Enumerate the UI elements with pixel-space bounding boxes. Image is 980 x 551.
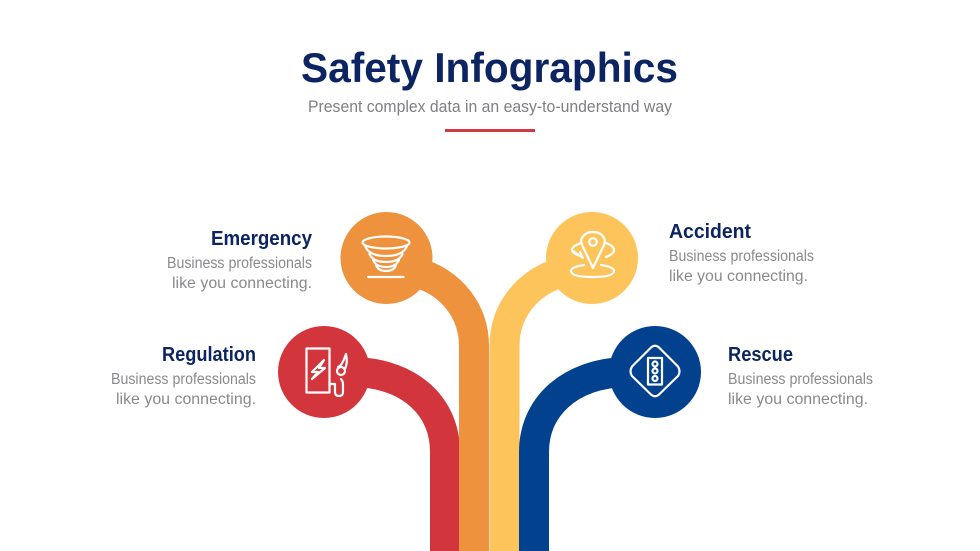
text block: regulation: Business professionals	[111, 371, 256, 388]
text block: rescue: Business professionals	[728, 371, 873, 388]
icon: map pin with rings	[571, 232, 614, 277]
text block: regulation: like you connecting.	[116, 391, 256, 408]
title underline	[445, 129, 535, 132]
text block: regulation: Regulation	[162, 344, 256, 366]
text block: accident: like you connecting.	[669, 268, 808, 285]
orange circle	[340, 212, 432, 304]
text block: emergency: like you connecting.	[172, 275, 312, 292]
yellow circle	[546, 212, 638, 304]
branch: regulation	[278, 326, 445, 551]
blue circle	[609, 326, 701, 418]
title: Safety Infographics	[301, 44, 678, 91]
text block: accident: Business professionals	[669, 248, 814, 265]
subtitle: Present complex data in an easy-to-understand way	[308, 98, 673, 116]
icon: traffic light in diamond sign	[630, 346, 680, 396]
orange stem	[415, 272, 474, 551]
red circle	[278, 326, 370, 418]
blue stem	[534, 372, 625, 551]
branch: accident	[504, 212, 638, 551]
text block: emergency: Business professionals	[167, 255, 312, 272]
text block: rescue: like you connecting.	[728, 391, 868, 408]
yellow stem	[504, 272, 563, 551]
icon: tornado funnel	[362, 236, 410, 277]
red stem	[355, 372, 445, 551]
text block: accident: Accident	[669, 221, 751, 243]
text block: emergency	[167, 228, 313, 292]
branch: rescue	[534, 326, 701, 551]
text block: rescue: Rescue	[728, 344, 793, 366]
text block: regulation	[111, 344, 256, 408]
text block: emergency: Emergency	[211, 228, 313, 250]
icon: fuel pump with lightning bolt	[306, 348, 347, 396]
text block: accident	[669, 221, 814, 285]
text block: rescue	[728, 344, 873, 408]
branch: emergency	[340, 212, 474, 551]
